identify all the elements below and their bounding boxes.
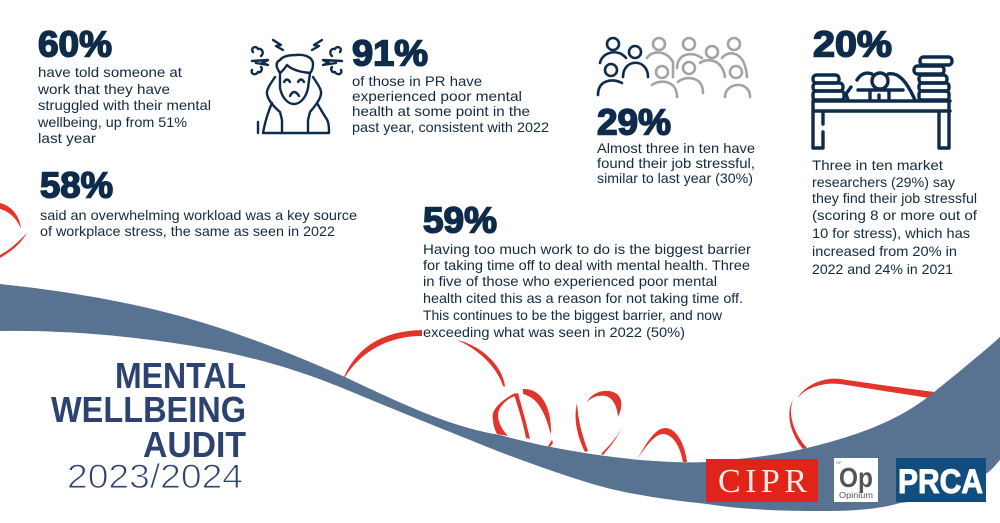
stat: 91%	[352, 32, 549, 135]
stat: 20% text: increased from 20% in	[812, 243, 957, 259]
icon: person asleep at desk	[813, 57, 952, 148]
stat: 59%	[423, 200, 751, 340]
logo: Opinium: Opinium	[839, 491, 873, 500]
stat: 60%: wellbeing, up from 51%	[37, 114, 187, 130]
title	[51, 355, 246, 496]
stat: 60%: 60%	[38, 24, 112, 64]
title: AUDIT	[143, 424, 246, 465]
icon: group of people	[598, 38, 750, 97]
stat: 91%: health at some point in the	[352, 103, 530, 119]
stat: 60%: struggled with their mental	[38, 97, 211, 113]
stat: 91%: experienced poor mental	[352, 88, 522, 104]
stat: 29%: found their job stressful,	[597, 155, 755, 171]
stat: 91%: of those in PR have	[352, 73, 482, 89]
title: 2023/2024	[67, 458, 243, 496]
stat: 20% text: they find their job stressful	[812, 190, 977, 206]
stat: 59%: 59%	[423, 200, 497, 240]
stat: 59%: in five of those who experienced poor mental	[423, 273, 717, 289]
logo: CIPR: CIPR	[718, 463, 807, 500]
logo: Opinium: Op	[839, 462, 873, 493]
stat: 58%: 58%	[40, 164, 113, 206]
stat: 59%: This continues to be the biggest barrier, and now	[423, 307, 723, 323]
stat: 29%: 29%	[597, 102, 671, 142]
stat: 20% text: (scoring 8 or more out of	[812, 207, 977, 223]
stat: 20% text: 10 for stress), which has	[812, 225, 970, 241]
stat: 20% heading: 20%	[813, 24, 892, 64]
wave: blue band	[0, 284, 1000, 511]
stat: 29%: Almost three in ten have	[597, 140, 755, 156]
stat: 20% text	[812, 157, 977, 277]
stat: 58%: of workplace stress, the same as seen in 2022	[40, 223, 335, 239]
stat: 60%: last year	[38, 130, 96, 146]
stat: 91%: 91%	[352, 32, 428, 74]
icon: stressed person	[252, 40, 342, 133]
stat: 60%: work that they have	[37, 81, 170, 97]
logo: PRCA: PRCA	[898, 463, 983, 501]
stat: 29%: similar to last year (30%)	[597, 170, 753, 186]
stat: 20% text: Three in ten market	[812, 157, 943, 173]
logo: Opinium	[834, 458, 878, 502]
logo: CIPR	[706, 459, 818, 502]
stat: 91%: past year, consistent with 2022	[352, 119, 549, 135]
stat: 59%: Having too much work to do is the biggest barrier	[423, 241, 751, 257]
stat: 59%: health cited this as a reason for not taking time off.	[423, 290, 743, 306]
stat: 58%	[40, 164, 357, 239]
stat: 60%: have told someone at	[38, 64, 182, 80]
stat: 59%: exceeding what was seen in 2022 (50%)	[423, 324, 685, 340]
ribbon: red swirls	[0, 203, 935, 462]
stat: 59%: for taking time off to deal with mental health. Three	[423, 257, 750, 273]
logo: Opinium: OF	[836, 460, 842, 465]
stat: 20% text: 2022 and 24% in 2021	[812, 261, 953, 277]
title: WELLBEING	[51, 389, 246, 430]
title: MENTAL	[115, 355, 246, 396]
stat: 60%	[37, 24, 211, 146]
stat: 20% text: researchers (29%) say	[812, 174, 955, 190]
stat: 29%	[597, 102, 755, 186]
stat: 58%: said an overwhelming workload was a key source	[40, 207, 357, 223]
